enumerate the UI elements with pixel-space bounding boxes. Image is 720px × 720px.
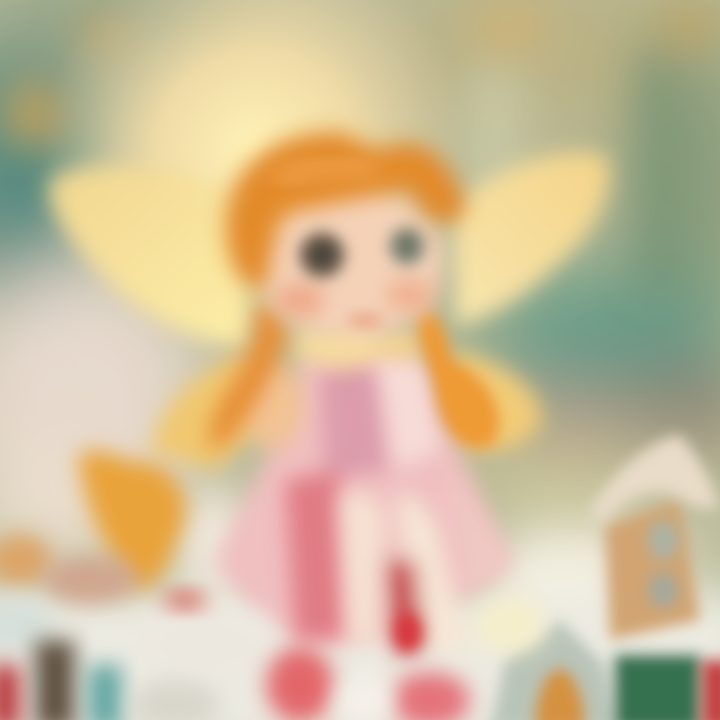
background: pale floor behind toys xyxy=(0,490,720,720)
mouth xyxy=(347,313,383,327)
wing: upper right xyxy=(455,152,609,325)
hair: pigtail left xyxy=(209,304,286,452)
wing: lower left xyxy=(150,350,265,470)
hair: pigtail right xyxy=(417,305,500,448)
wing: lower right xyxy=(450,350,542,450)
blush xyxy=(276,279,434,316)
neck and hands xyxy=(240,323,425,449)
hair highlight xyxy=(285,164,365,180)
background: vertical light columns and bokeh xyxy=(1,0,720,290)
toy: orange cat on the left xyxy=(78,450,186,590)
fairy figure xyxy=(209,132,510,655)
eye: left xyxy=(299,232,345,278)
toys: mushrooms at the bottom xyxy=(0,534,470,720)
toy: gingerbread house right xyxy=(590,435,720,640)
wing: upper left xyxy=(49,166,250,345)
dress xyxy=(215,344,510,640)
face xyxy=(260,186,444,338)
foreground light bloom xyxy=(474,597,546,653)
sun glow behind head xyxy=(40,0,470,365)
toy: small house bottom xyxy=(490,620,720,720)
legs xyxy=(340,492,470,655)
hair: top xyxy=(226,132,466,290)
eye: right xyxy=(388,226,426,266)
